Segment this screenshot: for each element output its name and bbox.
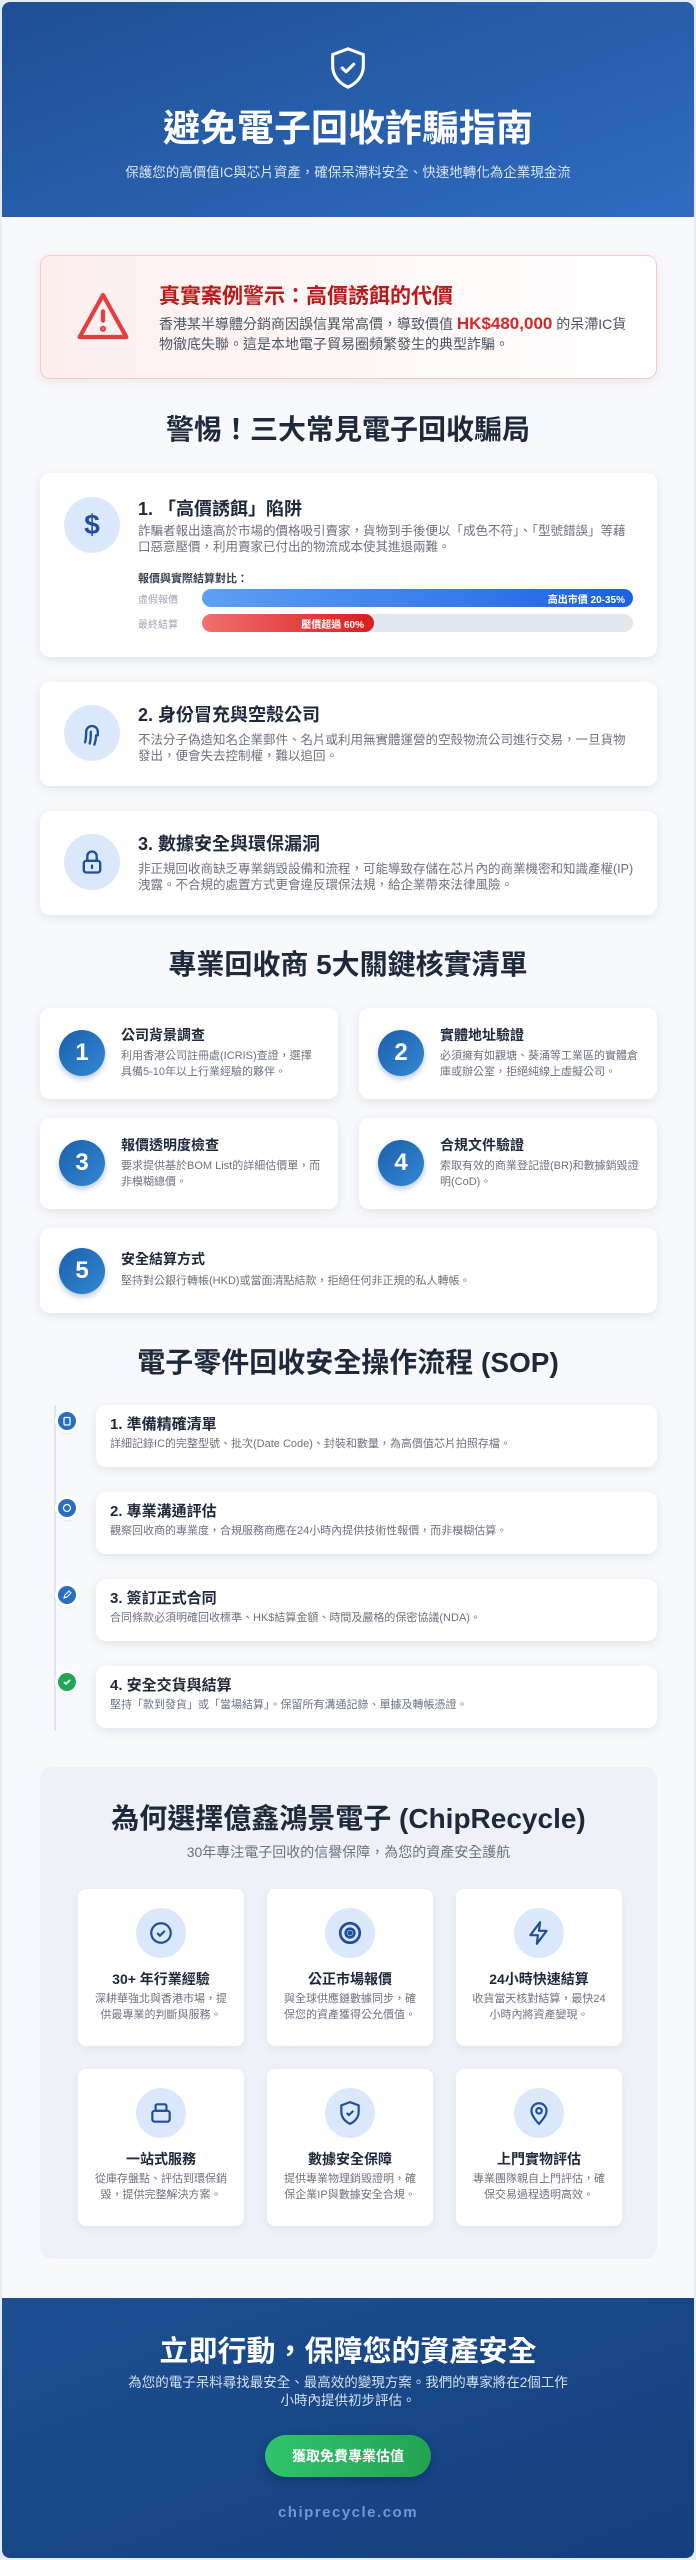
panel: why choose us [40,1767,657,2259]
feature: one-stop: 一站式服務 [126,2151,196,2167]
icon: shield [331,47,365,89]
feature: fair price [267,1889,433,2046]
feature: 24h: 24小時快速結算 [489,1971,589,1987]
feature: 24h: 收貨當天核對結算，最快24小時內將資產變現。 [472,1993,606,2021]
panel: scam 1: 報價與實際結算對比： [138,573,248,585]
bar chart: quote vs settlement: 壓價超過 60% [301,620,364,631]
panel: check 2: 必須擁有如觀塘、葵涌等工業區的實體倉庫或辦公室，拒絕純線上虛擬公司。 [440,1050,638,1078]
panel: scam 1: 1. 「高價誘餌」陷阱 [138,499,302,519]
feature: experience [78,1889,244,2046]
CTA banner [2,2298,694,2558]
domain: chiprecycle.com [278,2504,418,2521]
bar chart: quote vs settlement: 最終結算 [138,620,178,631]
feature: onsite: 上門實物評估 [497,2151,581,2167]
panel: check 1: 利用香港公司註冊處(ICRIS)查證，選擇具備5-10年以上行業經驗的夥伴。 [121,1050,312,1078]
feature: fair price: 與全球供應鏈數據同步，確保您的資產獲得公允價值。 [284,1993,416,2021]
bar chart: quote vs settlement: 高出市價 20-35% [548,595,625,606]
panel: check 5: 安全結算方式 [121,1251,205,1267]
header banner [2,2,694,217]
feature: data security [267,2069,433,2226]
step 2: 2. 專業溝通評估 [110,1503,217,1520]
panel: check 4 [359,1118,657,1209]
feature: onsite: 專業團隊親自上門評估，確保交易過程透明高效。 [473,2173,605,2201]
callout title: 真實案例警示：高價誘餌的代價 [159,285,453,308]
panel: check 4: 4 [394,1149,408,1176]
heading: 為何選擇億鑫鴻景電子 (ChipRecycle) [111,1803,586,1834]
step 1: 詳細記錄IC的完整型號、批次(Date Code)、封裝和數量，為高價值芯片拍照存檔。 [110,1438,511,1450]
callout text: 香港某半導體分銷商因誤信異常高價，導致價值 HK$480,000 的呆滯IC貨物徹底失聯。這是本地電子貿易圈頻繁發生的典型詐騙。 [159,314,626,352]
panel: check 2: 實體地址驗證 [440,1027,524,1043]
feature: experience: 深耕華強北與香港市場，提供最專業的判斷與服務。 [95,1993,227,2021]
heading: SOP: 電子零件回收安全操作流程 (SOP) [137,1347,559,1378]
feature: onsite [456,2069,622,2226]
panel: scam 1 [40,473,657,657]
step 3: 合同條款必須明確回收標準、HK$結算金額、時間及嚴格的保密協議(NDA)。 [110,1612,481,1624]
icon: fingerprint [64,705,120,761]
icon: warning triangle [78,292,128,340]
panel: check 1 [40,1008,338,1099]
panel: check 1: 1 [75,1039,89,1066]
feature: data security: 提供專業物理銷毀證明，確保企業IP與數據安全合規。 [284,2173,416,2201]
panel: check 1: 公司背景調查 [121,1027,205,1043]
panel: scam 2: 不法分子偽造知名企業郵件、名片或利用無實體運營的空殼物流公司進行交易，一旦貨物發出，便會失去控制權，難以追回。 [138,733,626,763]
panel: check 5 [40,1228,657,1313]
title: 避免電子回收詐騙指南 [163,108,533,149]
panel: check 2 [359,1008,657,1099]
panel: scam 1: 詐騙者報出遠高於市場的價格吸引賣家，貨物到手後便以「成色不符」、「型號錯誤」等藉口惡意壓價，利用賣家已付出的物流成本使其進退兩難。 [138,524,626,554]
step 3: 3. 簽訂正式合同 [110,1590,217,1607]
icon: money: $ [84,509,100,540]
step 3 [55,1586,658,1646]
panel: check 3: 要求提供基於BOM List的詳細估價單，而非模糊總價。 [121,1160,320,1188]
CTA button: 獲取免費專業估值 [292,2448,404,2464]
heading: checklist: 專業回收商 5大關鍵核實清單 [168,949,528,980]
CTA button [265,2435,431,2477]
panel: check 3: 報價透明度檢查 [121,1137,219,1153]
step 4 [55,1673,658,1732]
step 1: 1. 準備精確清單 [110,1416,217,1433]
CTA title: 立即行動，保障您的資產安全 [159,2336,536,2368]
panel: check 3: 3 [75,1149,89,1176]
step 4: 4. 安全交貨與結算 [110,1677,232,1694]
feature: 24h [456,1889,622,2046]
icon: money [64,497,120,553]
feature: experience: 30+ 年行業經驗 [112,1971,210,1987]
subtitle: 保護您的高價值IC與芯片資產，確保呆滯料安全、快速地轉化為企業現金流 [125,165,571,180]
panel: check 4: 索取有效的商業登記證(BR)和數據銷毀證明(CoD)。 [440,1160,639,1188]
feature: fair price: 公正市場報價 [308,1971,392,1987]
panel: scam 3 [40,811,657,915]
CTA text: 為您的電子呆料尋找最安全、最高效的變現方案。我們的專家將在2個工作小時內提供初步評估。 [128,2375,568,2408]
timeline: SOP steps [54,1405,658,1732]
callout: real case warning [40,255,657,379]
panel: check 5: 堅持對公銀行轉帳(HKD)或當面清點結款，拒絕任何非正規的私人轉帳。 [121,1275,471,1287]
panel: check 4: 合規文件驗證 [440,1137,524,1153]
feature: data security: 數據安全保障 [308,2151,392,2167]
subtitle: 30年專注電子回收的信譽保障，為您的資產安全護航 [187,1844,510,1860]
step 2 [55,1499,658,1558]
panel: scam 3: 3. 數據安全與環保漏洞 [138,834,320,854]
step 1 [55,1412,658,1472]
panel: scam 2: 2. 身份冒充與空殼公司 [138,705,320,725]
panel: scam 2 [40,682,657,786]
step 4: 堅持「款到發貨」或「當場結算」。保留所有溝通記錄、單據及轉帳憑證。 [110,1699,468,1711]
feature: one-stop: 從庫存盤點、評估到環保銷毀，提供完整解決方案。 [95,2173,227,2201]
panel: check 3 [40,1118,338,1209]
panel: check 2: 2 [394,1039,408,1066]
panel: scam 3: 非正規回收商缺乏專業銷毀設備和流程，可能導致存儲在芯片內的商業機密和知識產權(IP)洩露。不合規的處置方式更會違反環保法規，給企業帶來法律風險。 [138,862,633,892]
icon: lock [64,834,120,890]
bar chart: quote vs settlement [138,589,633,632]
step 2: 觀察回收商的專業度，合規服務商應在24小時內提供技術性報價，而非模糊估算。 [110,1525,507,1537]
heading: three scams: 警惕！三大常見電子回收騙局 [166,414,530,445]
bar chart: quote vs settlement: 虛假報價 [138,595,178,606]
feature: one-stop [78,2069,244,2226]
panel: check 5: 5 [75,1257,89,1284]
